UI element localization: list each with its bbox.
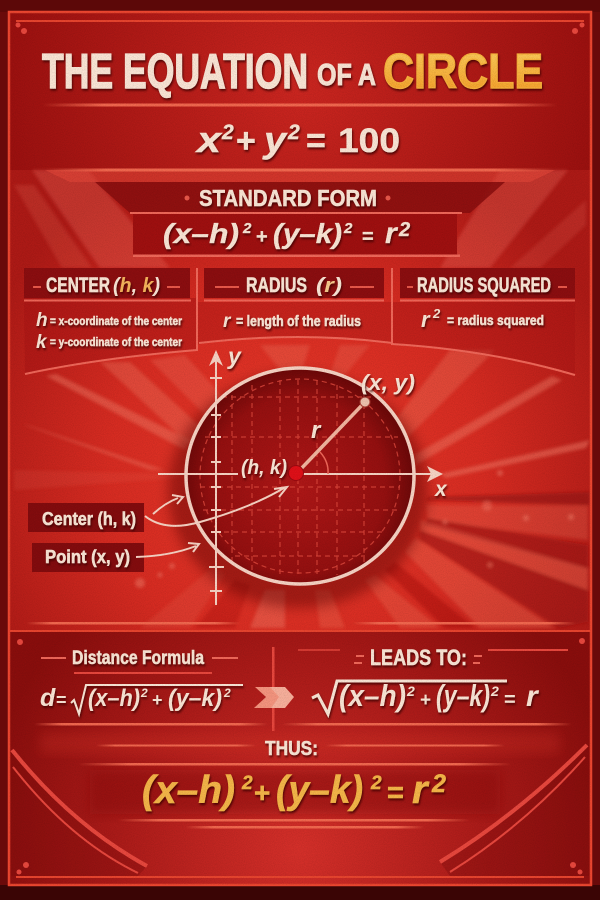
y axis xyxy=(209,350,224,605)
panel: standard form xyxy=(45,168,555,257)
text: radius squared definition: = radius squared xyxy=(447,312,544,328)
arrow: to circle xyxy=(136,543,199,557)
formula: square root equals r: (x–h) xyxy=(339,678,406,713)
heading: leads to: LEADS TO: xyxy=(370,645,467,670)
equation: x squared plus y squared equals 100: x xyxy=(195,119,223,160)
formula: final equation: = xyxy=(387,777,404,809)
divider xyxy=(272,647,274,731)
text: radius squared definition: r xyxy=(421,307,431,332)
heading: center: CENTER xyxy=(46,274,110,297)
panel: thus xyxy=(40,732,560,828)
formula: distance: (x–h) xyxy=(88,685,140,712)
decorative curves xyxy=(12,745,587,873)
formula: final equation: (y–k) xyxy=(276,769,363,812)
formula: final equation: 2 xyxy=(431,770,446,798)
callout: point (x, y) xyxy=(32,543,199,572)
formula: standard form: r xyxy=(385,217,399,250)
point (x, y): (x, y) xyxy=(361,370,415,395)
point (x, y) xyxy=(360,370,415,407)
formula: square root equals r: = xyxy=(504,689,516,711)
panel: distance formula xyxy=(40,648,243,714)
callout: point (x, y): Point (x, y) xyxy=(45,547,130,567)
formula: distance: 2 xyxy=(223,686,231,700)
formula: final equation xyxy=(142,768,446,812)
sunburst rays xyxy=(14,170,590,628)
formula: standard form: = xyxy=(362,226,374,248)
circle outline xyxy=(186,368,414,584)
text: k definition xyxy=(36,332,182,353)
arrow: double chevron xyxy=(254,687,294,708)
formula: final equation: + xyxy=(254,777,270,808)
axis labels: x xyxy=(434,478,448,501)
panel: center xyxy=(24,268,197,374)
formula: distance: 2 xyxy=(140,686,148,700)
title: OF A xyxy=(317,57,376,92)
x axis xyxy=(158,466,443,482)
heading: standard form: STANDARD FORM xyxy=(199,185,377,211)
formula: standard form: 2 xyxy=(242,220,252,237)
formula: standard form: 2 xyxy=(343,220,353,237)
formula: standard form xyxy=(163,217,410,250)
dashed grid xyxy=(200,379,400,578)
formula: square root equals r: + xyxy=(420,690,431,711)
axis labels: y xyxy=(227,343,242,369)
title: THE EQUATION xyxy=(42,45,308,99)
label: r: r xyxy=(311,417,322,444)
text: k definition: k xyxy=(36,332,48,353)
formula: distance: (y–k) xyxy=(168,685,222,712)
heading: radius: RADIUS xyxy=(246,274,307,297)
panel: radius squared xyxy=(392,268,575,375)
formula: distance: d xyxy=(40,684,56,712)
formula: final equation: (x–h) xyxy=(142,769,235,812)
center (h, k): (h, k) xyxy=(241,457,287,479)
formula: final equation: r xyxy=(412,768,430,812)
formula: standard form: (y–k) xyxy=(273,218,342,249)
equation: x squared plus y squared equals 100 xyxy=(195,119,400,160)
heading: center: (h, k) xyxy=(113,275,160,297)
arrow: to circle edge xyxy=(153,495,183,514)
formula: square root equals r: 2 xyxy=(406,683,415,699)
text: h definition xyxy=(36,310,182,331)
formula: final equation: 2 xyxy=(370,773,382,794)
equation: x squared plus y squared equals 100: 100 xyxy=(338,122,400,160)
equation: x squared plus y squared equals 100: = xyxy=(306,122,326,160)
formula: standard form: (x–h) xyxy=(163,218,239,249)
heading: distance formula: Distance Formula xyxy=(72,648,204,669)
text: radius squared definition xyxy=(421,306,544,332)
circle disc xyxy=(185,367,415,585)
panel: radius xyxy=(198,268,392,345)
text: radius definition: = length of the radius xyxy=(236,314,361,330)
formula: square root equals r: (y–k) xyxy=(436,678,490,713)
callout: center (h, k): Center (h, k) xyxy=(42,509,136,529)
panel: leads to xyxy=(298,645,568,714)
text: radius squared definition: 2 xyxy=(432,306,441,321)
heading: radius: (r) xyxy=(316,275,342,297)
text: radius definition: r xyxy=(223,311,232,332)
formula: square root equals r: r xyxy=(526,680,540,713)
formula: square root equals r xyxy=(312,678,540,714)
formula: final equation: 2 xyxy=(241,773,253,794)
text: radius definition xyxy=(223,311,361,332)
radius line xyxy=(297,402,365,473)
text: k definition: = y-coordinate of the center xyxy=(50,335,182,349)
arrow: to center xyxy=(145,487,287,526)
formula: distance: = xyxy=(56,690,67,710)
equation: x squared plus y squared equals 100: 2 xyxy=(221,121,234,144)
equation: x squared plus y squared equals 100: + xyxy=(236,122,256,160)
formula: distance: + xyxy=(152,690,163,710)
equation: x squared plus y squared equals 100: 2 xyxy=(287,121,300,144)
text: h definition: h xyxy=(36,310,48,331)
callout: center (h, k) xyxy=(28,487,287,532)
formula: square root equals r: 2 xyxy=(490,683,499,699)
heading: thus: THUS: xyxy=(265,738,318,760)
formula: standard form: + xyxy=(256,226,268,248)
equation: x squared plus y squared equals 100: y xyxy=(262,119,288,160)
text: h definition: = x-coordinate of the center xyxy=(50,314,182,328)
formula: distance xyxy=(40,684,243,714)
chart: circle on axes xyxy=(158,343,448,608)
formula: standard form: 2 xyxy=(398,219,410,241)
axis labels xyxy=(227,343,448,501)
title: CIRCLE xyxy=(383,45,543,99)
